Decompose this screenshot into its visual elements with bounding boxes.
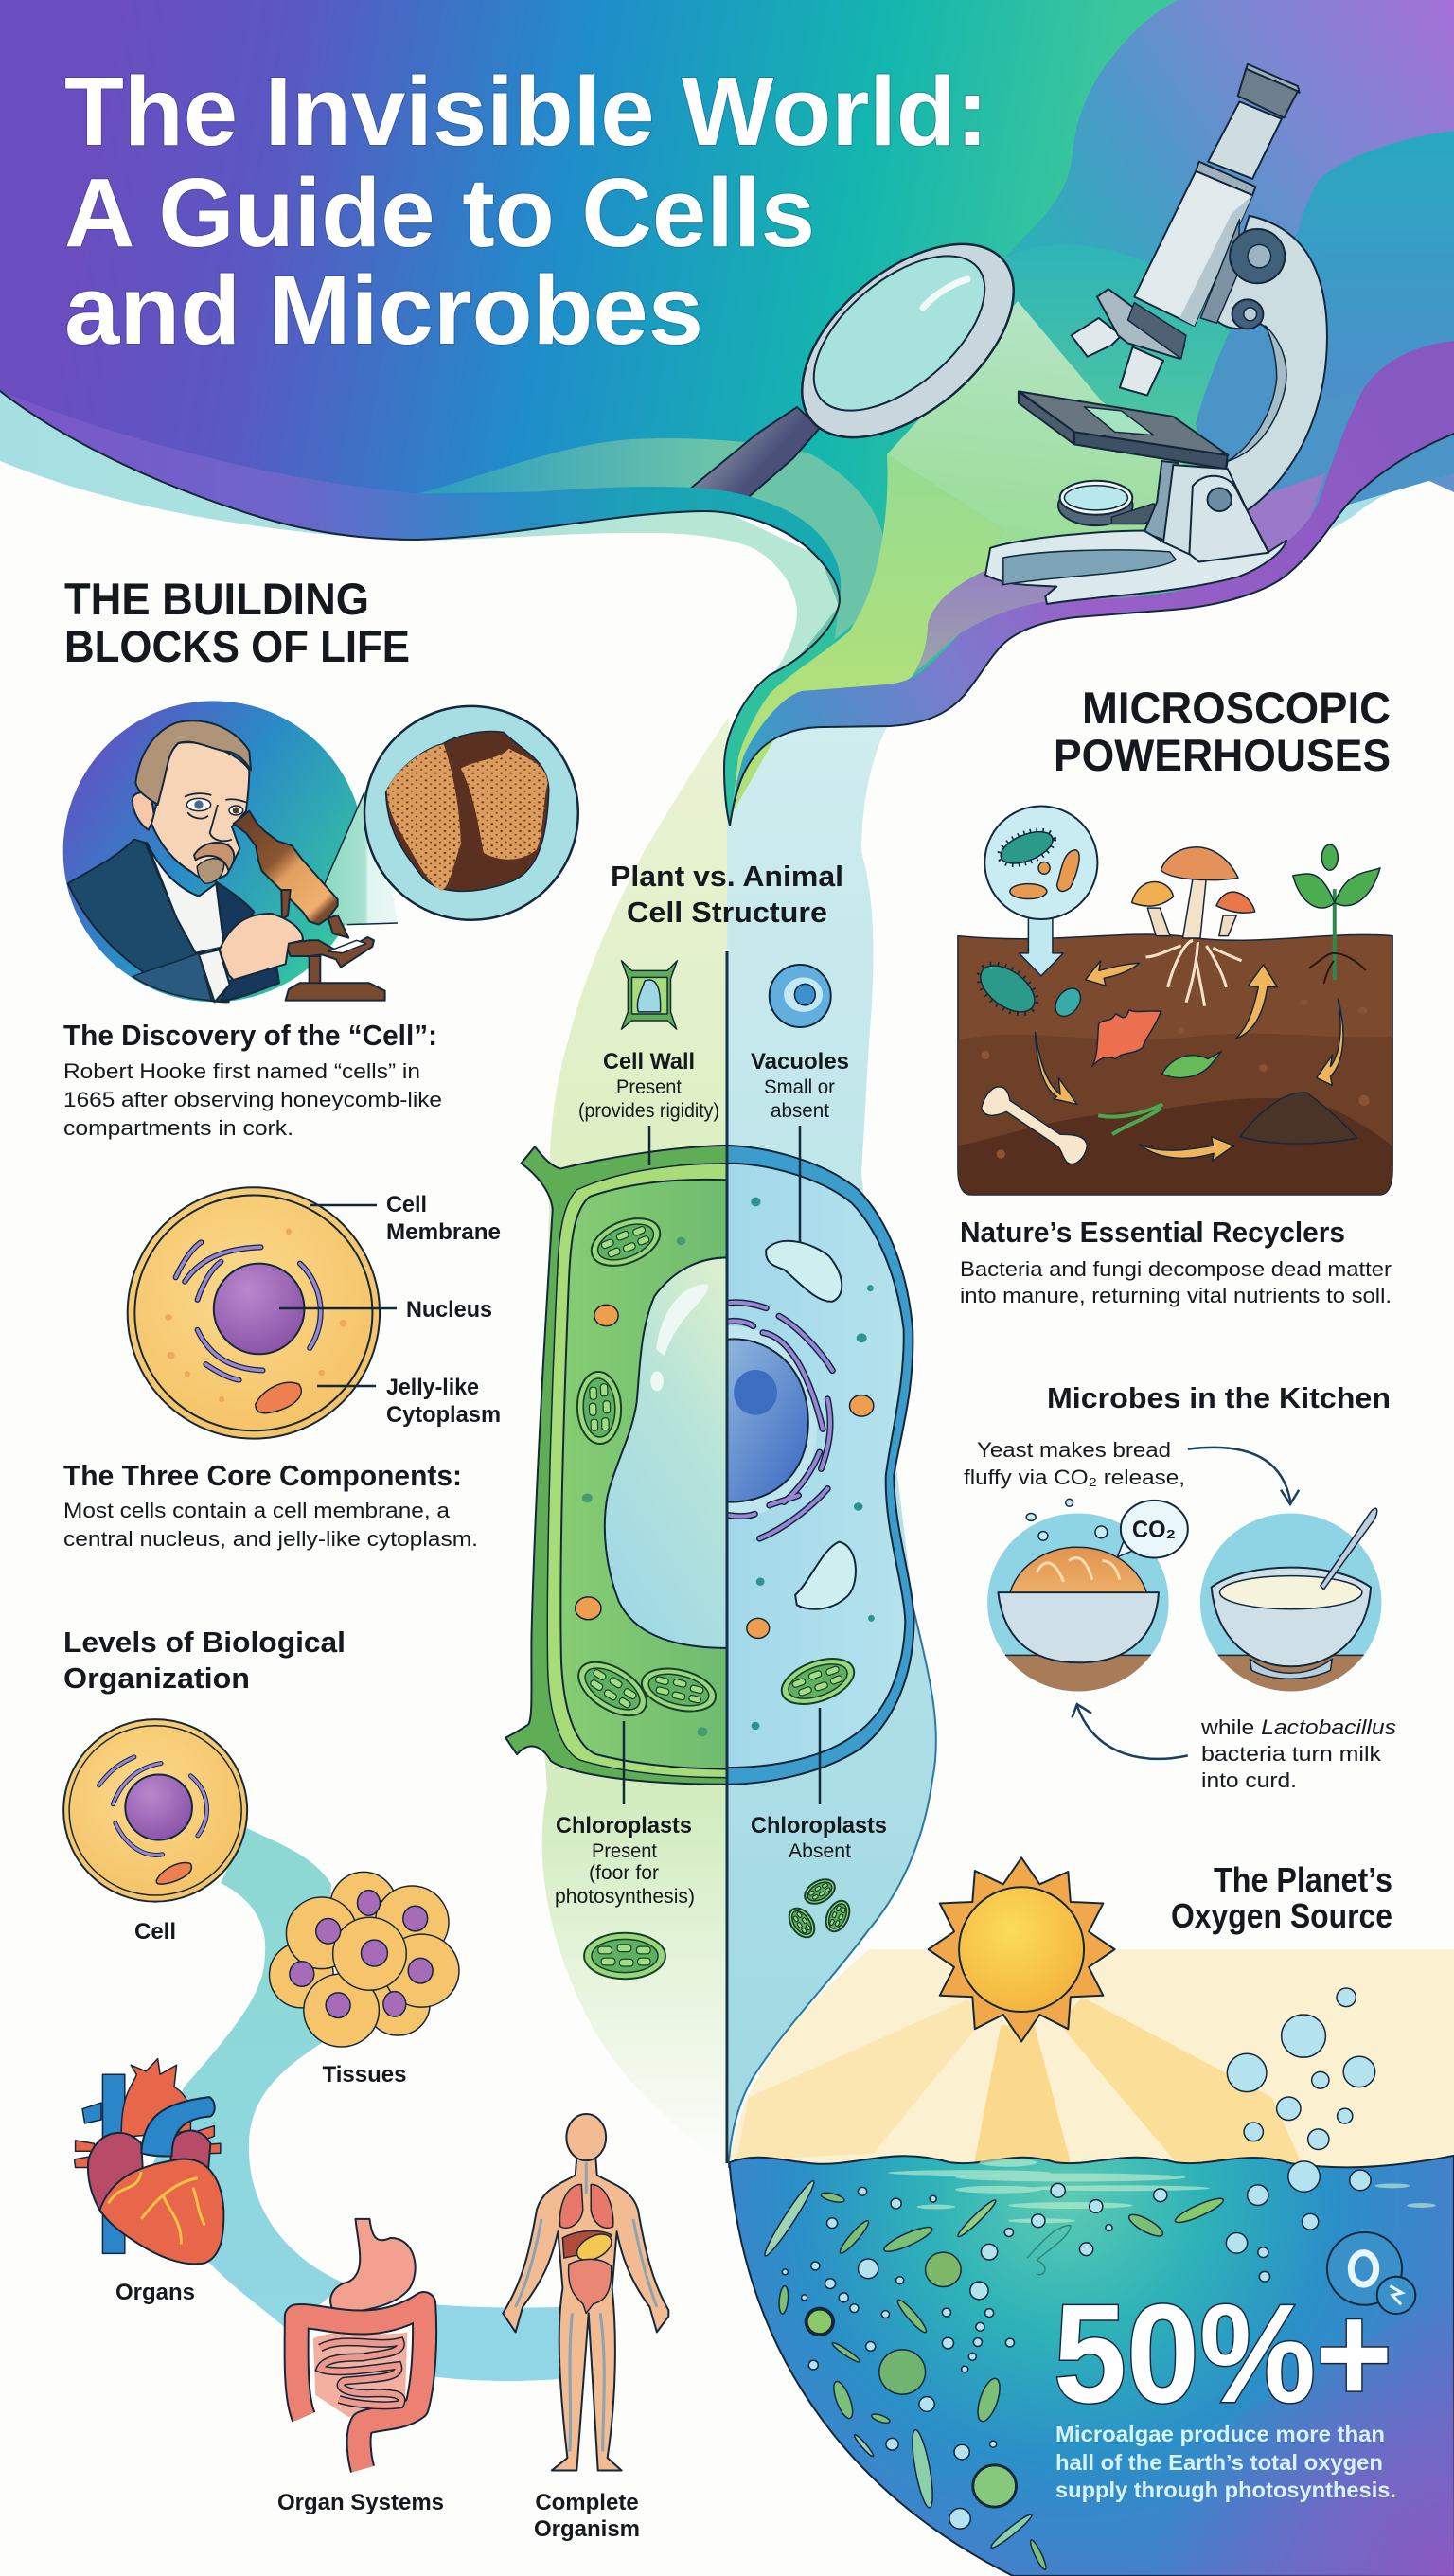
cell part leader lines bbox=[279, 1205, 397, 1386]
decaying red leaf bbox=[1092, 1010, 1161, 1067]
label: cell wall: Present bbox=[616, 1076, 682, 1098]
animal small dots bbox=[751, 1198, 875, 1730]
connector ribbon: levels of organisation bbox=[151, 1828, 346, 2331]
hooke cuff bbox=[199, 950, 230, 1002]
plant membrane stripe bbox=[547, 1164, 727, 1778]
eyepiece rim bbox=[1246, 64, 1300, 93]
label: vacuoles bbox=[751, 1049, 849, 1122]
level: complete organism bbox=[503, 2114, 668, 2470]
plant wall icon bbox=[622, 961, 677, 1029]
text: discovery of the cell: Robert Hooke first named “cells” in bbox=[63, 1059, 420, 1083]
heading: the planet's oxygen source: The Planet’s bbox=[1214, 1860, 1392, 1899]
icon: chloroplast present bbox=[584, 1933, 665, 1979]
labels: levels of organization: Organism bbox=[534, 2516, 640, 2542]
heading: the building blocks of life: THE BUILDING bbox=[64, 574, 369, 624]
heading: plant vs animal cell structure bbox=[611, 860, 843, 929]
body shading bbox=[1179, 195, 1252, 326]
heading: levels of biological organization: Organization bbox=[63, 1661, 250, 1695]
left ribbon bbox=[0, 391, 841, 606]
eyepiece bbox=[1238, 69, 1298, 117]
title: A Guide to Cells bbox=[64, 158, 815, 267]
panel: microbes in the kitchen bbox=[987, 1448, 1381, 1759]
oxygen molecule bbox=[1327, 2232, 1415, 2314]
upper tube bbox=[1208, 101, 1282, 179]
labels: cell parts bbox=[386, 1192, 501, 1428]
labels: levels of organization: Organs bbox=[115, 2280, 195, 2305]
labels: levels of organization: Tissues bbox=[323, 2062, 406, 2087]
brass microscope tube bbox=[234, 811, 338, 925]
nucleolus bbox=[734, 1370, 777, 1415]
animal orange organelles bbox=[747, 1395, 874, 1638]
magnifier rim bbox=[767, 206, 1049, 475]
label: cell wall: Cell Wall bbox=[603, 1049, 695, 1075]
text: microalgae caption: Microalgae produce more than bbox=[1055, 2422, 1385, 2446]
vacuole highlight bbox=[656, 1284, 708, 1356]
panel: animal side background bbox=[727, 727, 936, 2168]
text: three core components: The Three Core Components: bbox=[63, 1459, 462, 1492]
panel: plant side background bbox=[542, 717, 729, 2163]
decaying green leaf bbox=[1162, 1052, 1221, 1078]
text: three core components bbox=[63, 1459, 478, 1551]
panel: hero header bbox=[0, 0, 1454, 826]
portrait: Robert Hooke with microscope bbox=[68, 720, 385, 1002]
heading: the building blocks of life bbox=[64, 574, 410, 671]
animal vacuoles bbox=[766, 1241, 856, 1609]
plant central vacuole bbox=[605, 1257, 727, 1648]
objective lens left bbox=[1072, 318, 1122, 357]
text: yeast caption: fluffy via CO₂ release, bbox=[964, 1466, 1185, 1489]
magnified microbe callout bbox=[984, 806, 1097, 976]
soil mid layer bbox=[958, 1034, 1392, 1194]
label: chloroplasts present bbox=[555, 1813, 695, 1908]
nucleus bbox=[214, 1264, 304, 1354]
leader lines bbox=[624, 1126, 820, 1804]
pillar front bbox=[1163, 465, 1268, 556]
hooke eyes and brows bbox=[185, 793, 246, 841]
portrait disc bbox=[63, 701, 364, 1002]
label: chloroplasts present: Chloroplasts bbox=[556, 1813, 692, 1839]
plant cell wall bbox=[505, 1146, 727, 1785]
golgi organelles bbox=[176, 1242, 321, 1380]
icon: cell with labelled parts bbox=[128, 1187, 380, 1439]
animal cell wall bbox=[727, 1146, 914, 1785]
microscope post bbox=[310, 956, 320, 985]
jacket lower panel bbox=[133, 953, 211, 1001]
label: cell wall: (provides rigidity) bbox=[578, 1100, 719, 1122]
vessels bbox=[516, 2162, 657, 2452]
microscope bbox=[985, 64, 1327, 604]
soil top layer bbox=[958, 934, 1392, 1195]
base slot bbox=[1003, 550, 1176, 585]
teal strip near tip bbox=[724, 606, 839, 826]
jacket right side bbox=[216, 882, 254, 947]
labels: levels of organization: Complete bbox=[535, 2490, 639, 2515]
hooke hair bbox=[135, 720, 251, 805]
soil pebbles bbox=[981, 1000, 1370, 1159]
heading: plant vs animal cell structure: Plant vs. Animal bbox=[611, 860, 843, 893]
nucleus envelope bbox=[727, 1326, 817, 1519]
magnifier lens bbox=[787, 227, 1012, 439]
bone bbox=[982, 1087, 1087, 1164]
text: co2 bubble label: CO₂ bbox=[1132, 1517, 1176, 1543]
endoplasmic reticulum bbox=[729, 1303, 832, 1538]
connector ribbon to organism bbox=[431, 2304, 559, 2381]
text: three core components: central nucleus, and jelly-like cytoplasm. bbox=[63, 1527, 478, 1551]
water highlights bbox=[888, 2159, 1436, 2223]
label: chloroplasts absent: Chloroplasts bbox=[751, 1813, 887, 1839]
microscope stage lever bbox=[286, 937, 374, 968]
chart: Plant vs animal cell bbox=[505, 961, 914, 1785]
labels: cell parts: Membrane bbox=[386, 1219, 501, 1245]
specimen slip bbox=[328, 940, 366, 953]
blue lobe bbox=[1196, 227, 1454, 540]
animal nucleus bbox=[727, 1339, 808, 1502]
level: tissues bbox=[270, 1872, 459, 2047]
hooke beard bbox=[197, 859, 224, 883]
label: chloroplasts present: Present bbox=[592, 1840, 657, 1862]
text: nature's essential recyclers: Nature’s Essential Recyclers bbox=[960, 1216, 1345, 1249]
microscope support arm bbox=[281, 890, 291, 919]
centre divider bbox=[725, 951, 729, 2163]
text: lactobacillus caption: into curd. bbox=[1201, 1768, 1297, 1792]
animal cell icon bbox=[770, 965, 831, 1027]
panel: oxygen source scene bbox=[729, 1857, 1454, 2576]
small knob bbox=[1232, 299, 1263, 329]
stage bbox=[1020, 392, 1228, 455]
text: lactobacillus caption bbox=[1200, 1715, 1396, 1792]
label: vacuoles: Vacuoles bbox=[751, 1049, 849, 1075]
lens glare bbox=[923, 279, 967, 308]
title: The Invisible World: bbox=[64, 57, 988, 166]
title: and Microbes bbox=[64, 256, 703, 364]
wave outlines bbox=[0, 391, 1454, 826]
arrow: lactobacillus to bread bbox=[1072, 1704, 1188, 1759]
seedling bbox=[1293, 844, 1380, 984]
heading: microscopic powerhouses: POWERHOUSES bbox=[1054, 730, 1391, 780]
light beam bbox=[887, 301, 1183, 573]
top-right swirl bbox=[1003, 0, 1454, 492]
teal microbe bbox=[1055, 984, 1082, 1021]
sun bbox=[929, 1857, 1115, 2041]
green area bbox=[732, 454, 1003, 814]
text: microalgae caption: supply through photosynthesis. bbox=[1055, 2478, 1396, 2502]
hooke ear bbox=[133, 792, 154, 830]
heading: the planet's oxygen source bbox=[1171, 1860, 1392, 1935]
inner arm strip bbox=[1228, 326, 1286, 461]
text: discovery of the cell: The Discovery of the “Cell”: bbox=[63, 1019, 437, 1052]
plant small dots bbox=[582, 1237, 707, 1736]
lungs bbox=[559, 2184, 613, 2228]
text: microalgae caption bbox=[1055, 2422, 1396, 2502]
hooke mustache bbox=[194, 843, 234, 871]
cytoplasm dots bbox=[165, 1229, 346, 1402]
grey swirl under microscope bbox=[913, 530, 1273, 674]
compost pile bbox=[1240, 1093, 1357, 1144]
dark back plate bbox=[1200, 220, 1239, 323]
focus knob bbox=[1230, 229, 1285, 283]
hooke shirt bbox=[147, 843, 224, 953]
level: organs (heart) bbox=[75, 2059, 223, 2264]
label: vacuoles: absent bbox=[771, 1100, 829, 1122]
small intestine bbox=[320, 2341, 401, 2406]
sky bbox=[729, 1949, 1454, 2172]
mushrooms bbox=[1132, 847, 1255, 1006]
heading: microbes in the kitchen: Microbes in the Kitchen bbox=[1047, 1381, 1391, 1414]
heading: levels of biological organization: Levels of Biological bbox=[63, 1626, 346, 1659]
ocean water bbox=[729, 2156, 1454, 2576]
lavender swirl bbox=[1221, 473, 1325, 577]
stat: 50%+: 50%+ bbox=[1054, 2276, 1392, 2432]
cork sample bbox=[386, 732, 549, 891]
labels: cell parts: Jelly-like bbox=[386, 1375, 479, 1400]
label: chloroplasts present: photosynthesis) bbox=[555, 1886, 695, 1908]
cell membrane bbox=[134, 1196, 372, 1430]
cork magnified view bbox=[364, 706, 578, 920]
body tube bbox=[1134, 171, 1252, 326]
teal lower field bbox=[1003, 245, 1240, 540]
heading: microscopic powerhouses bbox=[1054, 683, 1391, 780]
intestines bbox=[569, 2259, 612, 2313]
main gradient shape bbox=[0, 0, 1454, 826]
pillar support bbox=[1189, 476, 1268, 562]
cork circle bbox=[364, 706, 578, 920]
magnifier handle bbox=[683, 407, 820, 502]
head bbox=[566, 2114, 606, 2160]
panel: levels of biological organization bbox=[63, 1719, 668, 2470]
label: vacuoles: Small or bbox=[764, 1076, 835, 1098]
heading: the planet's oxygen source: Oxygen Source bbox=[1171, 1896, 1392, 1935]
light cone bbox=[312, 792, 398, 925]
hooke face bbox=[151, 742, 249, 879]
soil bacterium bbox=[979, 957, 1037, 1021]
heading: plant vs animal cell structure: Cell Structure bbox=[627, 896, 827, 929]
sun rays bbox=[736, 1998, 1301, 2162]
hooke hand bbox=[220, 914, 303, 980]
animal cytoplasm bbox=[727, 1164, 905, 1768]
heading: the building blocks of life: BLOCKS OF LIFE bbox=[64, 621, 410, 671]
right pale underlay bbox=[1330, 434, 1454, 530]
microscope arm bbox=[1202, 216, 1327, 511]
right purple ribbon bbox=[730, 341, 1454, 826]
text: lactobacillus caption: bacteria turn milk bbox=[1201, 1742, 1382, 1766]
microscope tip bbox=[328, 915, 348, 938]
hooke jacket bbox=[68, 840, 229, 1002]
bread illustration bbox=[987, 1499, 1169, 1692]
base plate bbox=[985, 530, 1286, 604]
plant cytoplasm bbox=[560, 1180, 727, 1769]
text: nature's essential recyclers bbox=[960, 1216, 1392, 1307]
curd bowl illustration bbox=[1200, 1508, 1381, 1692]
pillar back bbox=[1144, 461, 1178, 542]
oxygen bubbles bbox=[782, 1988, 1375, 2529]
arrow: yeast to curd bbox=[1188, 1448, 1299, 1504]
stomach bbox=[330, 2219, 416, 2312]
gall and stomach bbox=[575, 2230, 613, 2265]
title bbox=[64, 57, 988, 364]
right teal swirl bbox=[1259, 131, 1454, 398]
heading: microscopic powerhouses: MICROSCOPIC bbox=[1082, 683, 1391, 733]
text: lactobacillus caption: while Lactobacillus bbox=[1200, 1715, 1396, 1739]
text: three core components: Most cells contain a cell membrane, a bbox=[63, 1499, 451, 1522]
co2 speech bubble bbox=[1117, 1501, 1188, 1557]
liver bbox=[562, 2231, 612, 2258]
body silhouette bbox=[503, 2157, 668, 2470]
text: discovery of the cell: 1665 after observing honeycomb-like bbox=[63, 1088, 442, 1111]
level: organ systems bbox=[296, 2219, 425, 2469]
label: chloroplasts absent: Absent bbox=[789, 1840, 851, 1862]
labels: levels of organization: Organ Systems bbox=[277, 2490, 444, 2515]
mirror bbox=[1058, 481, 1160, 525]
purple water corner bbox=[1013, 2288, 1454, 2576]
animal panel outline bbox=[729, 1609, 936, 2168]
mint arc bbox=[417, 438, 887, 694]
text: discovery of the cell bbox=[63, 1019, 442, 1140]
chloroplasts in cell bbox=[570, 1209, 860, 1727]
labels: cell parts: Nucleus bbox=[406, 1297, 492, 1323]
labels: levels of organization: Cell bbox=[134, 1919, 176, 1945]
label: cell wall bbox=[578, 1049, 719, 1122]
heading: levels of biological organization bbox=[63, 1626, 346, 1695]
left pale underlay wave bbox=[0, 379, 840, 675]
hooke circle and light cone bbox=[63, 701, 398, 1002]
microscope base bbox=[286, 983, 385, 1001]
green roots debris bbox=[1098, 1104, 1162, 1134]
specimen slide bbox=[1084, 407, 1154, 435]
labels: levels of organization bbox=[115, 1919, 640, 2542]
label: chloroplasts absent bbox=[751, 1813, 887, 1862]
panel: soil nutrient cycle bbox=[958, 806, 1392, 1195]
labels: cell parts: Cytoplasm bbox=[386, 1402, 501, 1428]
icon: chloroplasts absent bbox=[784, 1874, 854, 1942]
plant orange organelles bbox=[576, 1305, 618, 1620]
mitochondrion bbox=[256, 1382, 301, 1413]
text: discovery of the cell: compartments in cork. bbox=[63, 1116, 293, 1140]
label: chloroplasts present: (foor for bbox=[589, 1862, 659, 1884]
text: yeast caption: Yeast makes bread bbox=[977, 1438, 1171, 1462]
text: microalgae caption: hall of the Earth’s total oxygen bbox=[1055, 2450, 1383, 2475]
text: nature's essential recyclers: into manure, returning vital nutrients to soll. bbox=[960, 1284, 1392, 1307]
soil bottom layer bbox=[958, 1098, 1392, 1194]
icon: magnifying glass bbox=[767, 206, 1049, 475]
microalgae bbox=[761, 2178, 1226, 2571]
objective lens right bbox=[1120, 347, 1163, 396]
small intestine backing bbox=[313, 2332, 407, 2417]
labels: cell parts: Cell bbox=[386, 1192, 427, 1217]
text: nature's essential recyclers: Bacteria and fungi decompose dead matter bbox=[960, 1257, 1392, 1281]
collar bbox=[1196, 162, 1256, 195]
text: yeast caption bbox=[964, 1438, 1185, 1489]
cycle arrows bbox=[1035, 961, 1343, 1161]
nosepiece bbox=[1097, 289, 1184, 359]
large intestine bbox=[296, 2304, 425, 2469]
level: cell bbox=[63, 1719, 247, 1902]
